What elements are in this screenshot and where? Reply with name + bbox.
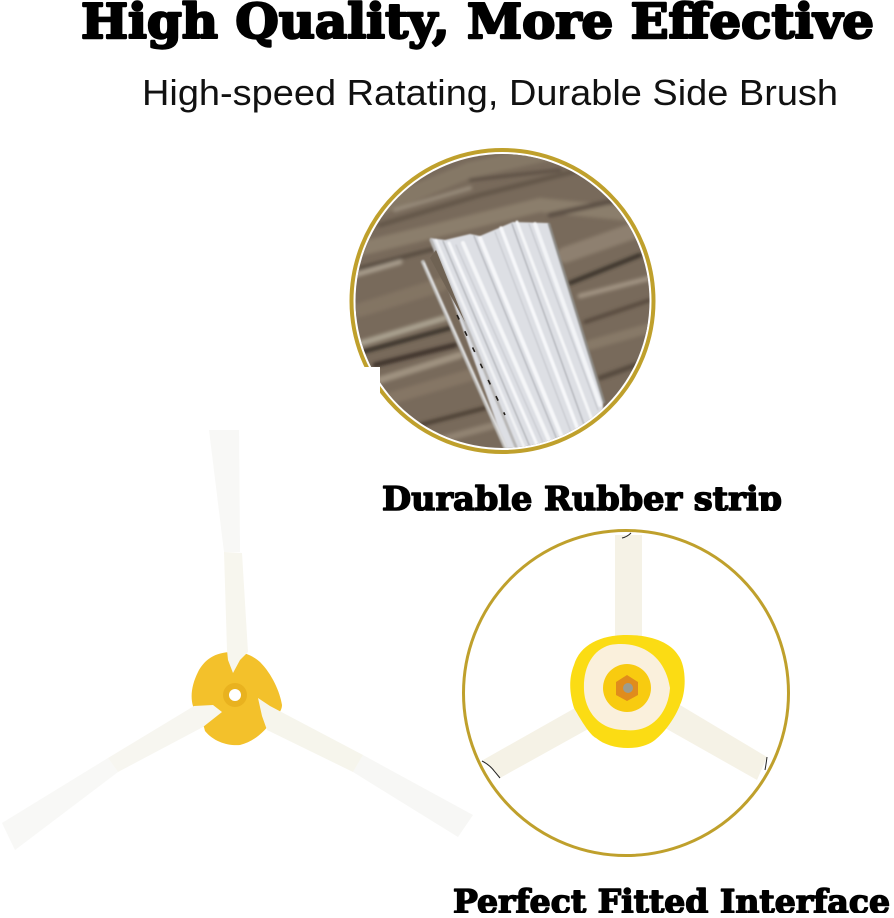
left arm xyxy=(483,708,590,778)
right arm xyxy=(258,698,473,837)
label: durable rubber strip: Durable Rubber strip xyxy=(382,479,782,518)
white notch xyxy=(348,367,380,393)
main side brush illustration xyxy=(2,430,473,850)
gold ring xyxy=(464,530,788,856)
yellow hub xyxy=(570,635,685,748)
arm end marks xyxy=(482,533,767,778)
top arm xyxy=(615,535,642,640)
left arm xyxy=(2,705,222,850)
white bristles xyxy=(423,222,604,460)
wood background xyxy=(350,148,656,460)
hub hole xyxy=(223,683,247,707)
panel: perfect fitted interface close-up xyxy=(464,530,788,856)
panel: durable rubber strip close-up xyxy=(348,148,656,460)
gaps between bristles xyxy=(430,250,465,322)
right arm xyxy=(665,705,767,780)
top arm xyxy=(209,430,248,673)
gold ring xyxy=(352,150,654,452)
subtitle: High-speed Ratating, Durable Side Brush xyxy=(142,72,838,113)
yellow hub xyxy=(192,652,282,745)
